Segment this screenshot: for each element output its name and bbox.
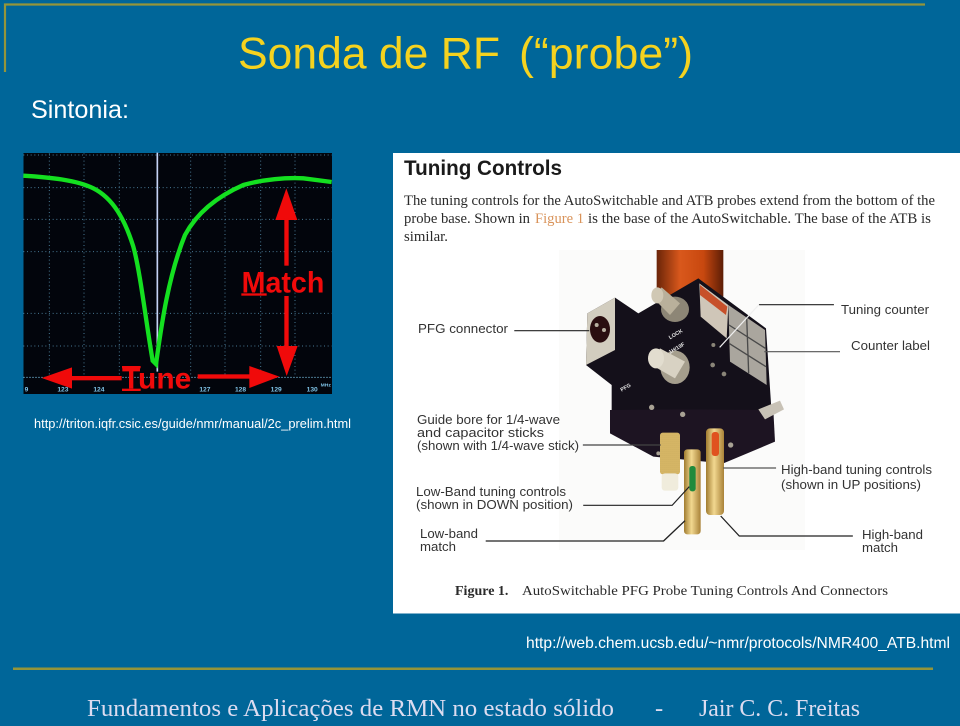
figure callouts: Counter label — [851, 338, 930, 353]
frequency axis labels: 129 — [271, 387, 282, 394]
screws — [649, 405, 733, 455]
panel paragraph: Figure 1 — [535, 211, 584, 227]
panel: tuning controls document — [393, 153, 960, 614]
engraved port labels: PFG — [620, 383, 632, 393]
copper tube — [657, 250, 723, 297]
title — [238, 30, 693, 78]
frequency axis labels: 123 — [57, 387, 69, 394]
figure callouts: (shown in DOWN position) — [416, 497, 573, 512]
oscilloscope grid — [23, 153, 332, 375]
title: (“probe”) — [519, 30, 693, 78]
screws — [710, 343, 726, 376]
label: Match: Match — [242, 267, 324, 300]
frequency axis labels: 9 — [25, 387, 29, 394]
LOCK BNC connector — [661, 297, 689, 322]
probe photograph — [486, 250, 853, 550]
top and left frame lines — [5, 4, 925, 72]
panel paragraph: The tuning controls for the AutoSwitchable and ATB probes extend from the bottom of the — [404, 193, 935, 209]
high-band tuning rod — [706, 428, 724, 515]
figure caption: Figure 1. — [455, 584, 508, 599]
figure callouts: (shown in UP positions) — [781, 477, 921, 492]
counter label plate — [699, 283, 728, 338]
figure callouts: Low-band — [420, 526, 478, 541]
footer text: - — [655, 695, 663, 722]
PFG connector — [586, 298, 615, 365]
probe lower body — [610, 401, 784, 534]
figure callouts: Tuning counter — [841, 302, 930, 317]
frequency axis labels: 130 — [307, 387, 318, 394]
match arrow — [42, 188, 298, 389]
panel paragraph: is the base of the AutoSwitchable. The base of the ATB is — [588, 211, 931, 227]
label: Tune: Tune — [122, 362, 191, 395]
frequency axis labels: 124 — [93, 387, 105, 394]
frequency axis labels: 128 — [235, 387, 246, 394]
tune arrows — [42, 367, 72, 389]
figure callouts: PFG connector — [418, 321, 509, 336]
base underside — [610, 409, 775, 463]
subtitle: Sintonia: Sintonia: — [31, 96, 129, 124]
panel heading: Tuning Controls — [404, 157, 562, 180]
engraved port labels: LOCK — [668, 328, 684, 341]
frequency axis labels: MHz — [321, 383, 331, 389]
side pin — [758, 401, 784, 419]
figure callouts: High-band — [862, 527, 923, 542]
figure callouts — [416, 302, 933, 555]
1/4-wave stick — [660, 433, 680, 474]
panel paragraph: probe base. Shown in — [404, 211, 531, 227]
figure callouts: Low-Band tuning controls — [416, 484, 567, 499]
probe upper body — [586, 250, 772, 413]
figure callouts: and capacitor sticks — [417, 425, 545, 440]
source link: triton: http://triton.iqfr.csic.es/guide/nmr/manual/2c_prelim.html — [34, 416, 351, 431]
figure callouts: match — [420, 539, 456, 554]
frequency axis labels — [25, 383, 331, 394]
low-band tuning rod — [684, 449, 701, 534]
engraved port labels: 1H/19F — [668, 341, 687, 356]
engraved port labels — [620, 328, 687, 393]
figure callouts: (shown with 1/4-wave stick) — [417, 438, 579, 453]
tuning dip curve — [23, 176, 332, 364]
leader lines — [486, 305, 853, 541]
source link: ucsb: http://web.chem.ucsb.edu/~nmr/protocols/NMR400_ATB.html — [526, 635, 950, 652]
figure callouts: Guide bore for 1/4-wave — [417, 412, 560, 427]
panel: tuning oscilloscope screen — [23, 153, 332, 395]
panel paragraph: similar. — [404, 229, 448, 245]
marker line — [155, 153, 160, 372]
footer text: Fundamentos e Aplicações de RMN no estado sólido — [87, 695, 614, 722]
photo backdrop — [559, 250, 805, 550]
lower BNC connector — [660, 351, 690, 384]
footer divider — [13, 668, 933, 670]
title: Sonda de RF — [238, 30, 500, 78]
footer text: Jair C. C. Freitas — [699, 695, 860, 722]
base body — [586, 278, 772, 413]
panel paragraph — [404, 193, 935, 245]
frequency axis labels: 127 — [199, 387, 211, 394]
frequency axis — [23, 376, 332, 379]
figure caption: AutoSwitchable PFG Probe Tuning Controls And Connectors — [522, 584, 888, 599]
figure callouts: match — [862, 540, 898, 555]
figure callouts: High-band tuning controls — [781, 462, 933, 477]
footer text — [87, 695, 860, 722]
